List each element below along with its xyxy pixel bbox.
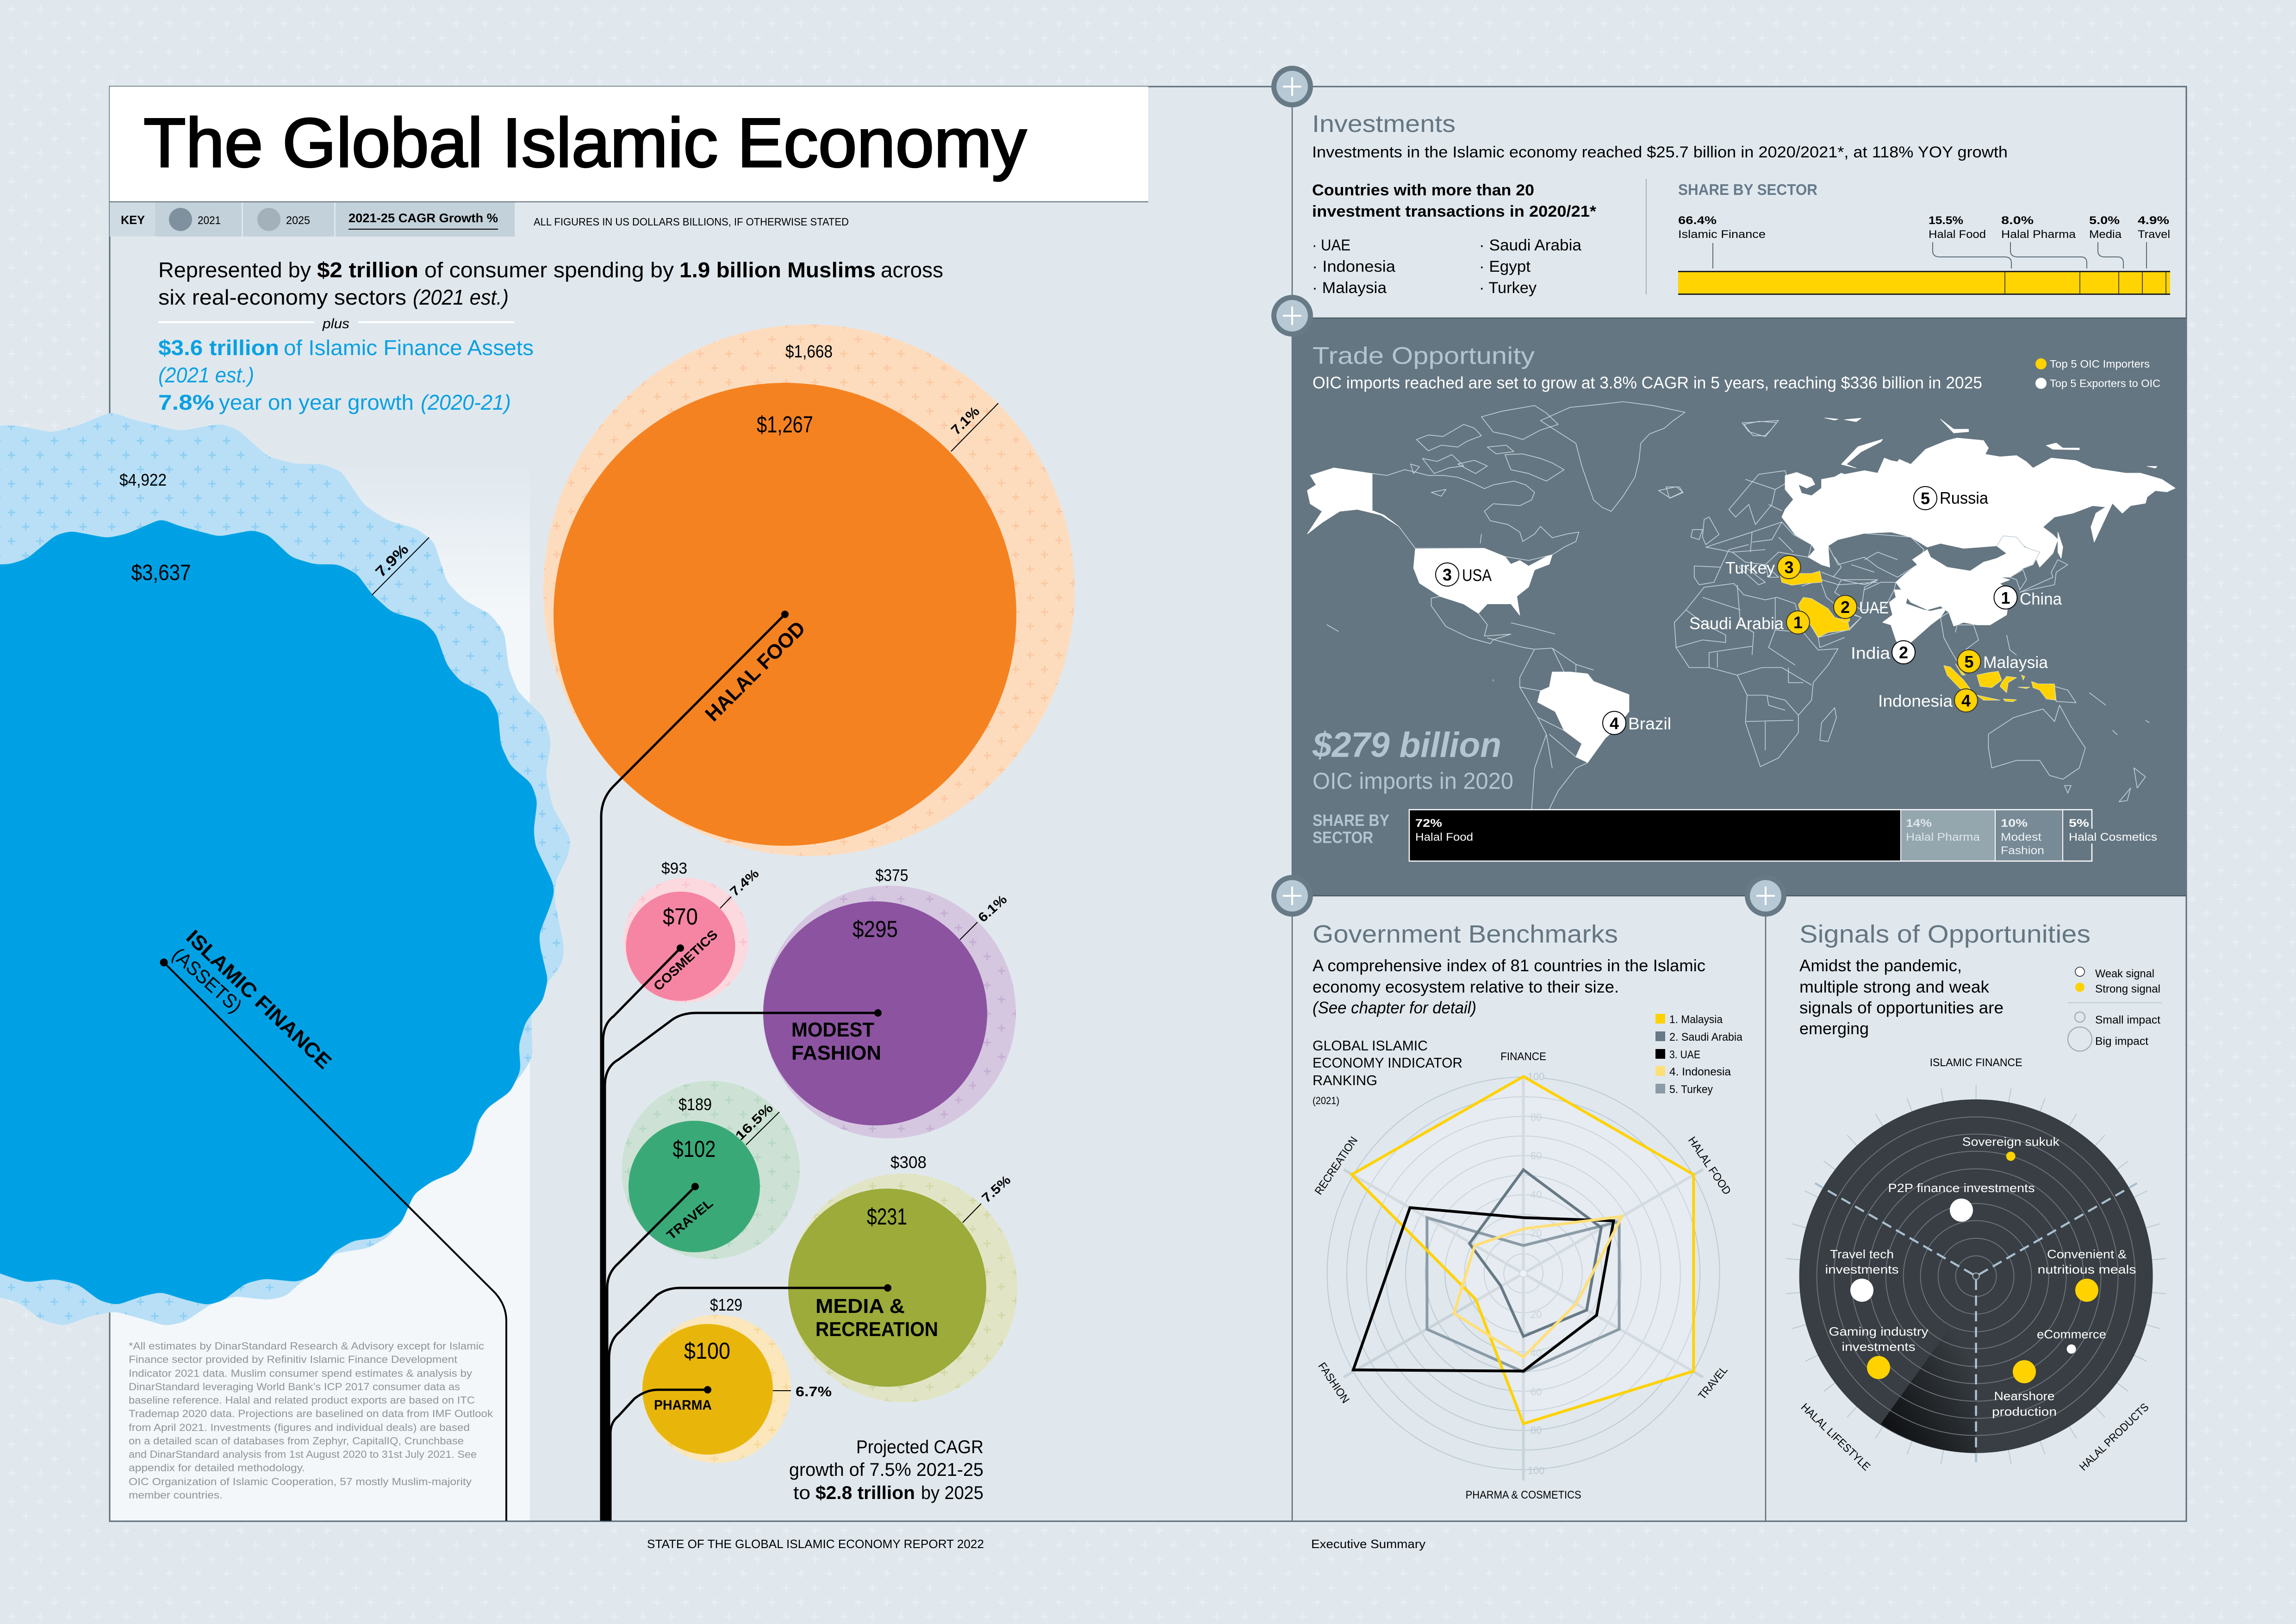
- key legend: 2021-25 CAGR Growth %: [348, 211, 498, 225]
- map legend: [2035, 358, 2160, 389]
- panel: government benchmarks: [1313, 920, 1743, 1501]
- projected CAGR note: $2.8 trillion: [815, 1483, 915, 1503]
- radar axis labels: PHARMA & COSMETICS: [1466, 1489, 1581, 1501]
- trade share by sector bar: 72%: [1415, 817, 1442, 830]
- trade share by sector bar: Fashion: [2001, 844, 2044, 857]
- intro text block: (2021 est.): [413, 285, 509, 309]
- trade share by sector bar: [1313, 810, 2157, 861]
- trade share by sector bar: Halal Pharma: [1906, 831, 1980, 843]
- projected CAGR note: growth of 7.5% 2021-25: [789, 1460, 983, 1480]
- title: The Global Islamic Economy: [143, 104, 1027, 181]
- panel: investments: [1312, 111, 2170, 297]
- chart: Modest Fashion bubble: [763, 866, 1016, 1138]
- Russia: [1782, 438, 2175, 567]
- radar legend: 5. Turkey: [1669, 1083, 1713, 1096]
- radar legend: 2. Saudi Arabia: [1669, 1031, 1743, 1043]
- chart: Modest Fashion bubble: 6.1%: [975, 892, 1010, 925]
- countries list: [1312, 181, 1597, 297]
- chart: Cosmetics bubble: 7.4%: [727, 866, 762, 899]
- Islamic Finance 2025 outer blob: [0, 413, 570, 1325]
- chart: Travel bubble: [622, 1081, 800, 1259]
- signal points: P2P finance investments: [1888, 1181, 2035, 1195]
- chart: Cosmetics bubble: COSMETICS: [651, 927, 721, 993]
- chart: Pharma bubble: PHARMA: [654, 1398, 712, 1413]
- share by sector bar: 66.4%: [1678, 214, 1717, 227]
- OIC imports figure: $279 billion: [1312, 725, 1501, 765]
- intro text block: (2021 est.): [158, 363, 254, 387]
- radar scale labels: 40: [1531, 1189, 1542, 1200]
- chart: Travel bubble: TRAVEL: [664, 1196, 716, 1243]
- Islamic Finance leader line: [164, 962, 506, 1521]
- disc sector labels: [1798, 1056, 2151, 1473]
- footnote: member countries.: [129, 1489, 223, 1501]
- footer: STATE OF THE GLOBAL ISLAMIC ECONOMY REPORT 2022: [647, 1537, 984, 1551]
- radar axis labels: FASHION: [1315, 1360, 1352, 1405]
- signal points: eCommerce: [2037, 1327, 2106, 1341]
- disc sector labels: HALAL PRODUCTS: [2077, 1401, 2151, 1473]
- UAE: [1842, 616, 1849, 622]
- branching tree connector lines: [601, 611, 891, 1521]
- map country markers: USA: [1462, 566, 1492, 585]
- chart: Halal Food bubble: [543, 325, 1075, 856]
- intro text block: $2 trillion: [317, 258, 418, 282]
- map country markers: 4: [1961, 691, 1971, 710]
- map country markers: Indonesia: [1878, 692, 1953, 710]
- intro text block: six real-economy sectors: [158, 285, 406, 309]
- map country markers: Saudi Arabia: [1689, 614, 1784, 633]
- panel: signals of opportunities: signals of opportunities are: [1799, 998, 2004, 1017]
- signal points: Sovereign sukuk: [1962, 1135, 2060, 1149]
- radar scale labels: 80: [1531, 1424, 1542, 1436]
- countries list: · UAE: [1312, 237, 1350, 254]
- intro text block: (2020-21): [421, 390, 511, 414]
- signal points: [1825, 1135, 2136, 1418]
- icon: plus badge signals: [1745, 875, 1786, 917]
- share by sector bar: Media: [2089, 228, 2122, 241]
- radar ticks: [1786, 1085, 2166, 1464]
- ranking title: RANKING: [1313, 1072, 1377, 1088]
- share by sector bar: Travel: [2138, 228, 2170, 241]
- projected CAGR note: by 2025: [921, 1483, 983, 1503]
- countries list: · Egypt: [1479, 258, 1531, 275]
- signal points: Convenient &: [2047, 1247, 2127, 1261]
- icon: plus badge trade: [1271, 295, 1313, 337]
- chart: Halal Food bubble: $1,668: [785, 342, 833, 362]
- icon: plus badge government: [1271, 875, 1313, 917]
- radar legend: 1. Malaysia: [1669, 1013, 1723, 1026]
- panel: investments: Investments in the Islamic economy reached $25.7 billion in 2020/2021*, at 118% YOY growth: [1312, 144, 2008, 161]
- intro text block: plus: [322, 316, 349, 331]
- panel: government benchmarks: (See chapter for detail): [1313, 998, 1476, 1017]
- intro text block: of Islamic Finance Assets: [284, 336, 534, 360]
- government heading: Government Benchmarks: [1313, 920, 1618, 948]
- trade share by sector bar: 14%: [1906, 817, 1932, 830]
- radar disc: [1799, 1099, 2153, 1462]
- intro text block: year on year growth: [219, 390, 414, 414]
- panel: signals of opportunities: multiple strong and weak: [1799, 977, 1990, 996]
- trade share by sector bar: SECTOR: [1313, 829, 1373, 847]
- share by sector bar: Islamic Finance: [1678, 228, 1766, 241]
- signals heading: Signals of Opportunities: [1799, 920, 2091, 948]
- chart: Modest Fashion bubble: $375: [876, 866, 908, 885]
- map country markers: 1: [1793, 613, 1803, 632]
- Islamic Finance label: ISLAMIC FINANCE: [182, 926, 336, 1074]
- chart: Islamic Finance wavy blob: $4,922: [119, 470, 167, 489]
- radar legend: 4. Indonesia: [1669, 1066, 1731, 1078]
- map country markers: 1: [2001, 588, 2010, 607]
- chart: Modest Fashion bubble: FASHION: [791, 1042, 881, 1064]
- footnote: [129, 1340, 493, 1501]
- chart: Media and Recreation bubble: MEDIA &: [815, 1295, 905, 1318]
- India: [1883, 590, 1947, 655]
- radar axis labels: RECREATION: [1313, 1135, 1360, 1197]
- share by sector bar: Halal Food: [1929, 228, 1986, 241]
- footnote: appendix for detailed methodology.: [129, 1462, 305, 1474]
- intro text block: Represented by: [158, 258, 311, 282]
- signal points: nutritious meals: [2037, 1262, 2136, 1276]
- chart: Islamic Finance wavy blob: [0, 413, 570, 1521]
- chart: Travel bubble: $189: [678, 1095, 712, 1114]
- chart: Pharma bubble: 6.7%: [796, 1384, 832, 1399]
- investments heading: Investments: [1312, 111, 1456, 137]
- intro text block: $3.6 trillion: [158, 336, 279, 360]
- chart: Pharma bubble: $129: [710, 1295, 742, 1314]
- intro text block: 7.8%: [158, 390, 214, 414]
- map legend: Top 5 OIC Importers: [2050, 358, 2150, 370]
- Saudi Arabia: [1798, 597, 1849, 637]
- radar axis labels: HALAL FOOD: [1686, 1135, 1733, 1197]
- map country markers: 2: [1899, 643, 1908, 662]
- world map: Eurasia, Africa and Oceania: [1666, 418, 2175, 802]
- radar axis labels: FINANCE: [1500, 1050, 1546, 1063]
- radar series polygons: [1352, 1076, 1693, 1424]
- projected CAGR note: [789, 1437, 983, 1503]
- share by sector bar: 8.0%: [2001, 214, 2034, 227]
- chart: Pharma bubble: [642, 1295, 832, 1463]
- map country markers: Turkey: [1725, 558, 1775, 577]
- Islamic Finance 2021 inner blob: [0, 519, 554, 1305]
- chart: Modest Fashion bubble: MODEST: [791, 1018, 874, 1041]
- panel: signals of opportunities: Amidst the pandemic,: [1799, 956, 1962, 975]
- map legend: Top 5 Exporters to OIC: [2050, 377, 2160, 389]
- Alaska and USA: [1307, 468, 1552, 615]
- chart: Travel bubble: 16.5%: [733, 1100, 776, 1143]
- footer: [647, 1537, 1425, 1551]
- disc sector labels: ISLAMIC FINANCE: [1930, 1056, 2022, 1069]
- footnote: *All estimates by DinarStandard Research & Advisory except for Islamic: [129, 1340, 484, 1352]
- intro text block: [158, 258, 943, 414]
- panel: government benchmarks: economy ecosystem relative to their size.: [1313, 977, 1619, 996]
- footer: Executive Summary: [1311, 1537, 1425, 1551]
- radar scale labels: [1528, 1071, 1544, 1476]
- share by sector bar: 5.0%: [2089, 214, 2120, 227]
- footnote: Finance sector provided by Refinitiv Islamic Finance Development: [129, 1354, 457, 1365]
- intro text block: 1.9 billion Muslims: [679, 258, 876, 282]
- trade share by sector bar: Modest: [2001, 831, 2041, 843]
- key legend: [110, 202, 849, 237]
- chart: Media and Recreation bubble: 7.5%: [979, 1173, 1014, 1206]
- world map: Americas and Atlantic: [1307, 402, 1777, 810]
- panel dividers: [1292, 87, 1766, 1521]
- Turkey: [1780, 571, 1822, 585]
- map country markers: 3: [1785, 558, 1794, 577]
- share by sector bar: Halal Pharma: [2001, 228, 2076, 241]
- share by sector bar: SHARE BY SECTOR: [1678, 181, 1817, 198]
- intro text block: across: [881, 258, 943, 282]
- Indonesia and Malaysia: [1944, 664, 2055, 702]
- ranking title: [1313, 1037, 1462, 1106]
- footnote: OIC Organization of Islamic Cooperation, 57 mostly Muslim-majority: [129, 1476, 472, 1487]
- map country markers: Brazil: [1628, 714, 1671, 733]
- radar scale labels: 80: [1531, 1112, 1542, 1123]
- countries list: · Malaysia: [1312, 279, 1387, 297]
- chart: Cosmetics bubble: $70: [663, 904, 698, 930]
- countries list: investment transactions in 2020/21*: [1312, 203, 1597, 220]
- radar legend: 3. UAE: [1669, 1049, 1700, 1061]
- icon: plus badge investments: [1271, 66, 1313, 107]
- footnote: Trademap 2020 data. Projections are baselined on data from IMF Outlook: [129, 1408, 493, 1419]
- signal points: investments: [1825, 1262, 1898, 1276]
- chart: Media and Recreation bubble: RECREATION: [815, 1318, 938, 1341]
- radar scale labels: 40: [1531, 1347, 1542, 1359]
- map country markers: 3: [1443, 565, 1452, 584]
- map country markers: 4: [1610, 714, 1619, 733]
- chart: Media and Recreation bubble: $308: [890, 1153, 927, 1172]
- signal points: Gaming industry: [1829, 1324, 1928, 1338]
- countries list: Countries with more than 20: [1312, 181, 1534, 199]
- map country markers: India: [1851, 643, 1891, 662]
- countries list: · Turkey: [1479, 279, 1537, 297]
- chart: Media and Recreation bubble: $231: [867, 1204, 907, 1230]
- ranking title: ECONOMY INDICATOR: [1313, 1055, 1462, 1071]
- key legend: 2025: [286, 214, 310, 227]
- chart: Islamic Finance wavy blob: $3,637: [131, 561, 191, 585]
- projected CAGR note: to: [793, 1483, 810, 1503]
- chart: Pharma bubble: $100: [684, 1338, 730, 1364]
- radar axis labels: TRAVEL: [1696, 1364, 1730, 1402]
- key legend: ALL FIGURES IN US DOLLARS BILLIONS, IF OTHERWISE STATED: [534, 216, 849, 228]
- signal legend: Strong signal: [2095, 983, 2160, 995]
- map country markers: 5: [1964, 652, 1973, 671]
- share by sector bar: 15.5%: [1929, 214, 1963, 227]
- map country markers: Russia: [1940, 488, 1989, 507]
- key legend: 2021: [198, 214, 221, 227]
- footnote: on a detailed scan of databases from Zephyr, CapitalIQ, Crunchbase: [129, 1435, 464, 1447]
- Brazil: [1537, 672, 1629, 762]
- chart: Cosmetics bubble: $93: [661, 860, 687, 877]
- trade heading: Trade Opportunity: [1313, 343, 1535, 369]
- China: [1896, 536, 2040, 626]
- radar legend: [1655, 1013, 1743, 1096]
- radar scale labels: 60: [1531, 1386, 1542, 1398]
- map country markers: 5: [1921, 489, 1930, 508]
- radar chart: [1313, 1050, 1733, 1501]
- key legend: KEY: [121, 213, 145, 227]
- title banner: [110, 87, 1148, 202]
- signal legend: Big impact: [2095, 1035, 2148, 1048]
- footnote: from April 2021. Investments (figures and individual deals) are based: [129, 1422, 470, 1433]
- signal points: Nearshore: [1994, 1389, 2055, 1403]
- panel: government benchmarks: A comprehensive index of 81 countries in the Islamic: [1313, 956, 1705, 975]
- chart: Islamic Finance wavy blob: 7.9%: [372, 541, 411, 580]
- OIC imports figure: [1312, 725, 1513, 794]
- trade share by sector bar: Halal Food: [1415, 831, 1473, 843]
- panel: signals of opportunities: emerging: [1799, 1019, 1869, 1038]
- map country markers: UAE: [1859, 598, 1889, 617]
- footnote: Indicator 2021 data. Muslim consumer spend estimates & analysis by: [129, 1368, 472, 1379]
- radar scale labels: 100: [1528, 1071, 1544, 1082]
- ranking title: GLOBAL ISLAMIC: [1313, 1037, 1428, 1054]
- map country markers: [1436, 487, 2062, 735]
- radar axis labels: [1313, 1050, 1733, 1501]
- signal points: Travel tech: [1830, 1247, 1894, 1261]
- panel: trade opportunity: [1292, 318, 2186, 896]
- panel: trade opportunity: OIC imports reached are set to grow at 3.8% CAGR in 5 years, reaching $336 billion in 2025: [1313, 373, 1982, 392]
- signal points: investments: [1842, 1340, 1915, 1354]
- projected CAGR note: Projected CAGR: [856, 1437, 983, 1457]
- trade share by sector bar: 10%: [2001, 817, 2028, 830]
- ranking title: (2021): [1313, 1095, 1339, 1106]
- trade share by sector bar: SHARE BY: [1313, 812, 1389, 830]
- share by sector bar: [1678, 181, 2170, 294]
- chart: Modest Fashion bubble: $295: [852, 916, 898, 942]
- disc sector labels: HALAL LIFESTYLE: [1798, 1401, 1873, 1473]
- intro text block: of consumer spending by: [424, 258, 674, 282]
- chart: Halal Food bubble: HALAL FOOD: [701, 617, 810, 726]
- chart: Halal Food bubble: 7.1%: [948, 404, 983, 438]
- chart: Cosmetics bubble: [623, 860, 762, 1003]
- panel: signals of opportunities: [1786, 920, 2166, 1473]
- countries list: · Indonesia: [1312, 258, 1395, 275]
- radar scale labels: 20: [1531, 1309, 1542, 1320]
- chart: Halal Food bubble: $1,267: [757, 412, 813, 437]
- radar scale labels: 20: [1531, 1227, 1542, 1239]
- map country markers: 2: [1841, 598, 1850, 617]
- chart: Travel bubble: $102: [673, 1136, 716, 1162]
- trade share by sector bar: 5%: [2069, 817, 2089, 830]
- countries list: · Saudi Arabia: [1479, 237, 1581, 254]
- footnote: and DinarStandard analysis from 1st August 2020 to 31st July 2021. See: [129, 1449, 477, 1460]
- share by sector bar: 4.9%: [2138, 214, 2169, 227]
- footnote: DinarStandard leveraging World Bank’s ICP 2017 consumer data as: [129, 1381, 460, 1393]
- radar scale labels: 100: [1528, 1465, 1544, 1476]
- chart: Media and Recreation bubble: [788, 1153, 1017, 1402]
- footnote: baseline reference. Halal and related product exports are based on ITC: [129, 1394, 475, 1406]
- OIC imports figure: OIC imports in 2020: [1313, 768, 1513, 794]
- map country markers: China: [2020, 589, 2062, 608]
- signal legend: [2068, 967, 2162, 1051]
- trade share by sector bar: Halal Cosmetics: [2069, 831, 2157, 843]
- signal points: production: [1992, 1405, 2057, 1418]
- radar scale labels: 60: [1531, 1150, 1542, 1162]
- chart: Islamic Finance wavy blob: (ASSETS): [168, 943, 246, 1017]
- signal legend: Weak signal: [2095, 968, 2154, 980]
- signal legend: Small impact: [2095, 1014, 2160, 1026]
- map country markers: Malaysia: [1983, 653, 2048, 672]
